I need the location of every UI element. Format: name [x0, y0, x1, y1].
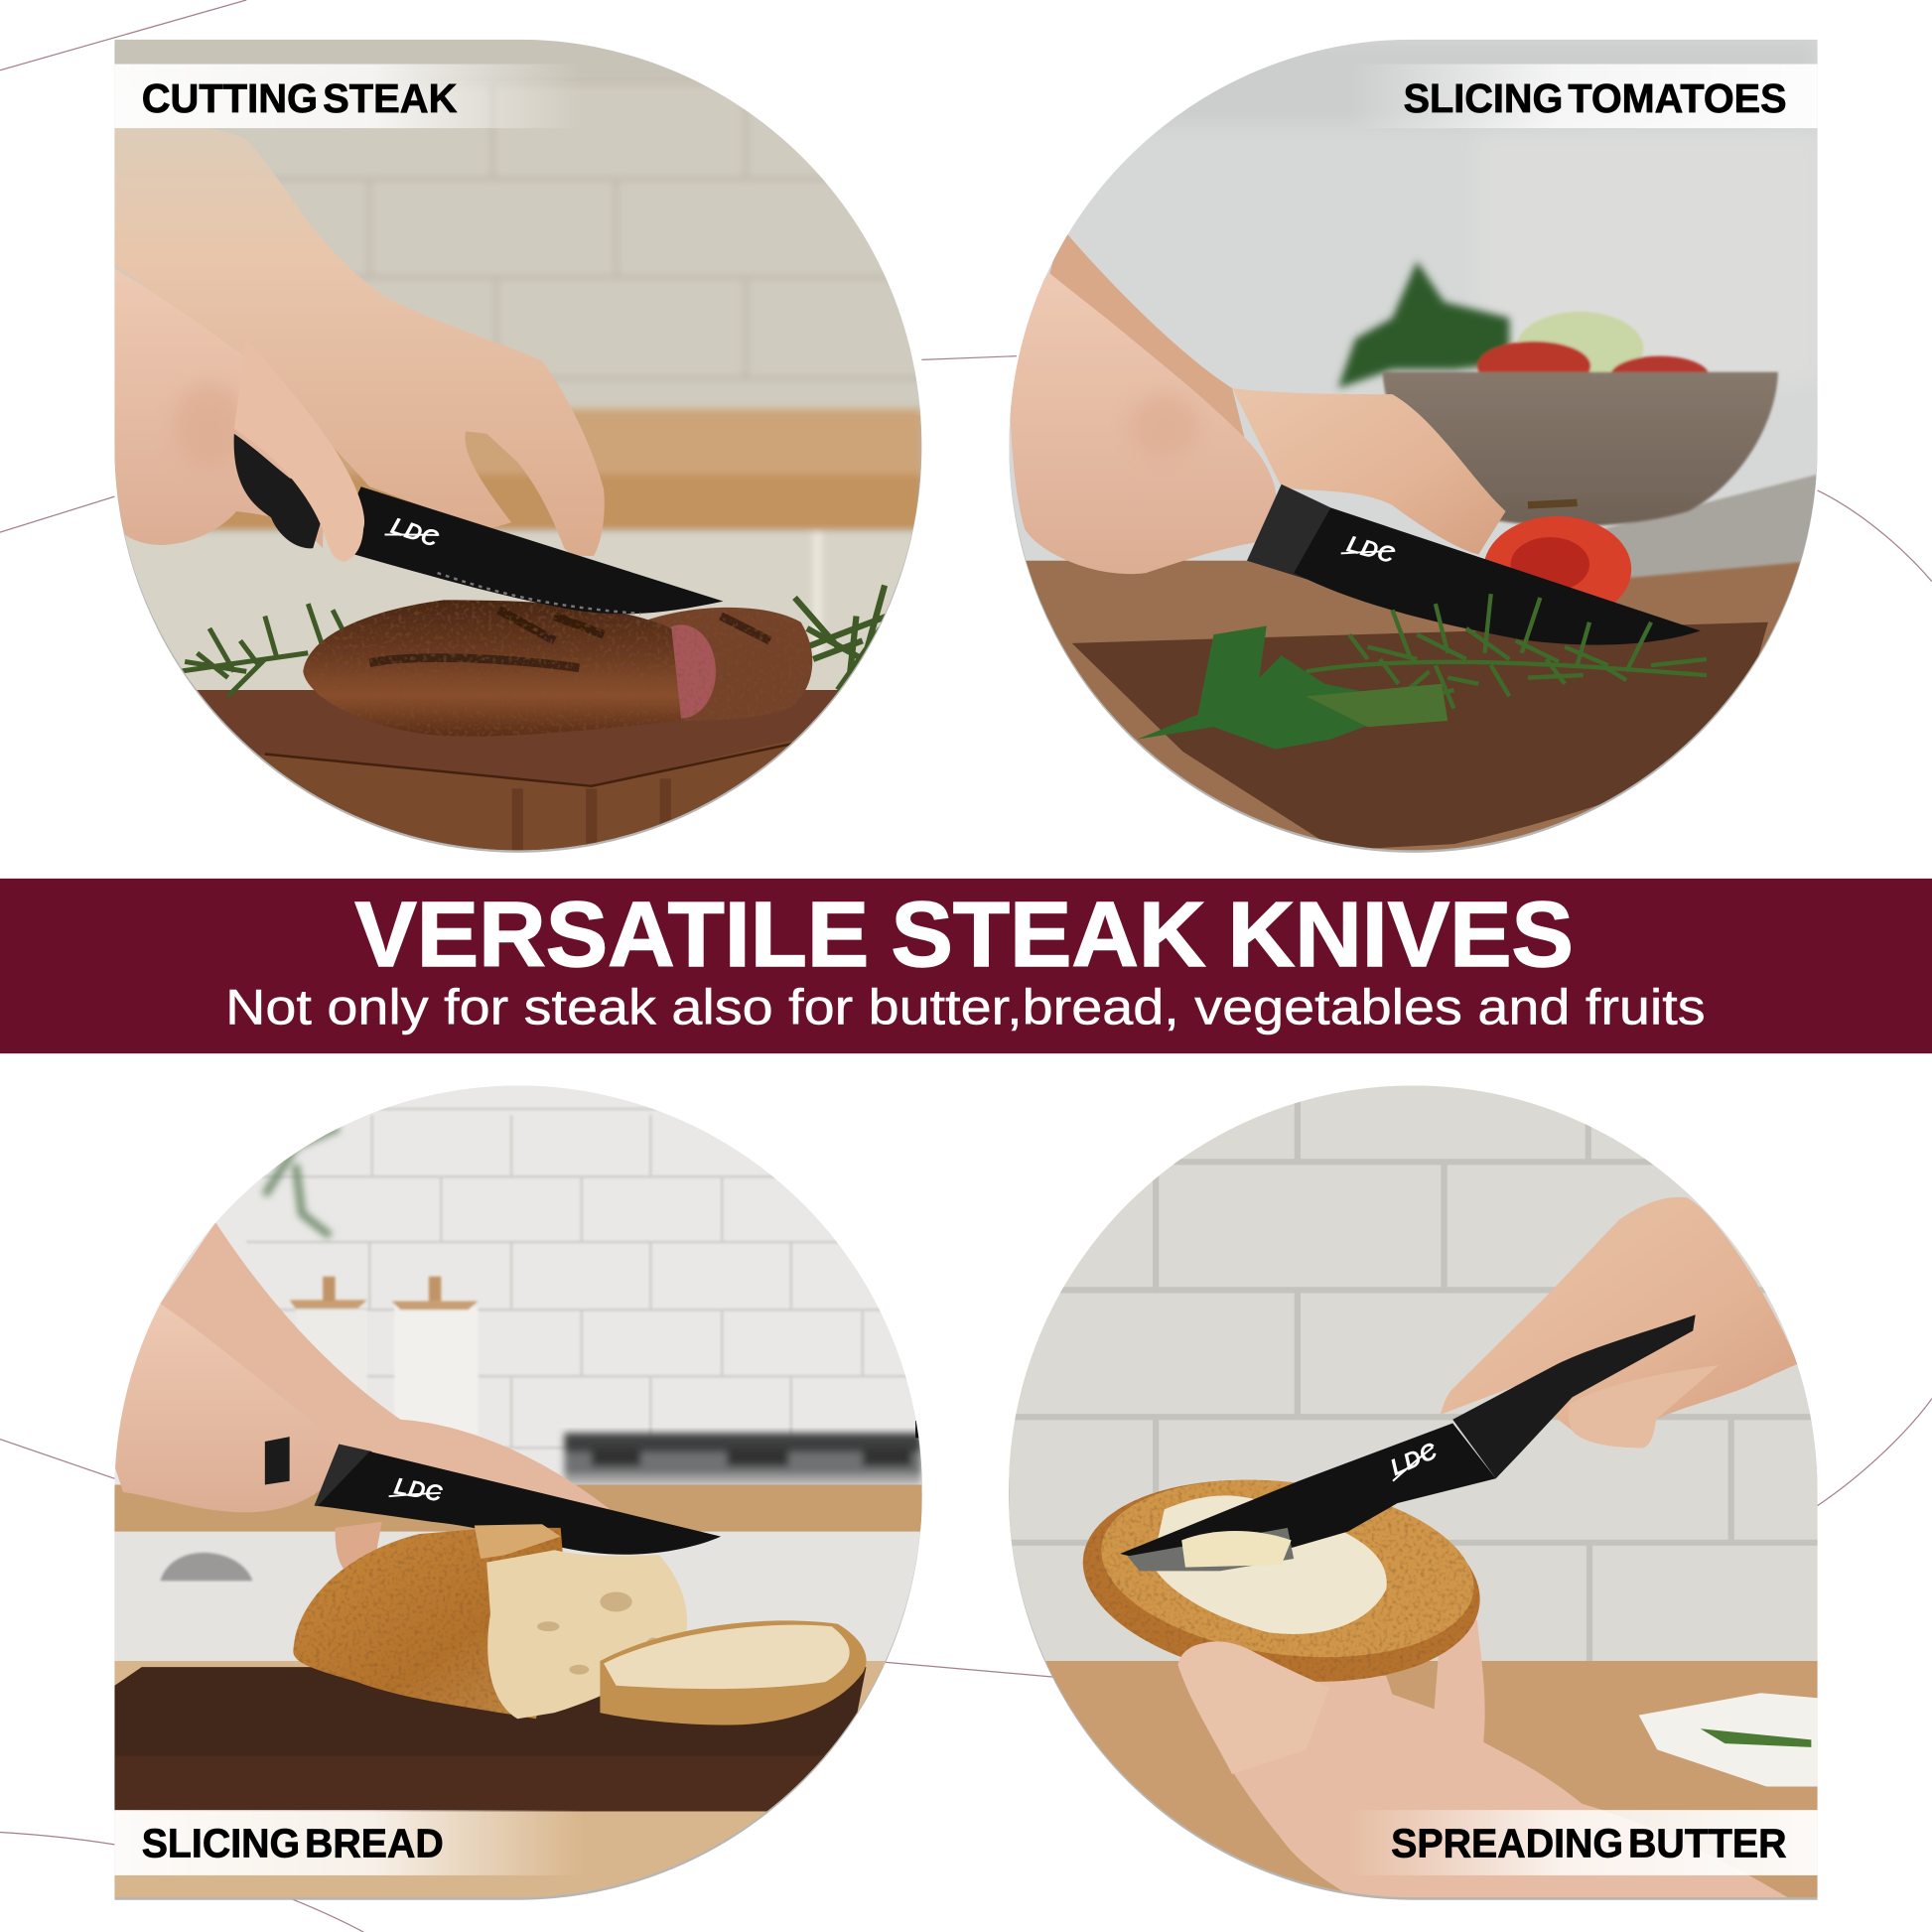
wood counter [1009, 561, 1818, 857]
logo [389, 1477, 443, 1501]
thumb over toast [1177, 1641, 1329, 1774]
knife [265, 1437, 721, 1555]
toast [1071, 1458, 1491, 1703]
label band: slicing bread [114, 1810, 583, 1875]
arm and hands [114, 1222, 610, 1571]
cabinet [114, 1532, 921, 1667]
thumb [234, 385, 365, 562]
banner background [0, 879, 1932, 1053]
scene: cutting steak [114, 40, 921, 850]
label: slicing bread: SLICING BREAD [142, 1820, 444, 1865]
panel edge: spreading butter [1009, 1088, 1818, 1900]
wood counter [114, 409, 921, 531]
panel: cutting steak [114, 40, 921, 853]
bread loaf [293, 1528, 567, 1719]
sprig [265, 1128, 339, 1236]
panel: slicing bread [114, 1085, 922, 1907]
wood table [114, 1661, 921, 1907]
wall [1009, 40, 1818, 582]
stove [564, 1433, 921, 1484]
cutting board [197, 690, 840, 850]
panel: slicing tomatoes [1009, 40, 1818, 857]
parsley [1138, 625, 1448, 750]
logo: LDC [1344, 530, 1398, 568]
tomato [1485, 498, 1632, 603]
wood table [1009, 1661, 1818, 1907]
cutting board [1072, 622, 1768, 850]
knife [1247, 484, 1701, 645]
logo: LDC [392, 1472, 445, 1507]
bread interior [475, 1524, 687, 1719]
knife [1120, 1314, 1696, 1571]
label band: cutting steak [114, 65, 583, 128]
subtitle: Not only for steak also for butter,bread, vegetables and fruits [225, 979, 1706, 1035]
label band: spreading butter [1349, 1810, 1818, 1875]
lower hand and fingers [1177, 1614, 1799, 1903]
cabinet [114, 531, 921, 697]
label band: slicing tomatoes [1349, 65, 1818, 128]
thumb on handle [1568, 1365, 1719, 1448]
dish with herbs [1639, 1693, 1818, 1787]
rosemary [179, 586, 888, 696]
arm and hands [1009, 228, 1506, 574]
rosemary [1307, 594, 1707, 715]
upper hand [1441, 1197, 1798, 1448]
kitchen wall [114, 40, 921, 415]
scene: slicing bread [114, 1085, 921, 1907]
cutting board [114, 1667, 866, 1811]
label: slicing tomatoes: SLICING TOMATOES [1404, 75, 1787, 121]
canisters [290, 1277, 479, 1436]
knife [234, 434, 724, 614]
banner [0, 879, 1932, 1053]
panel edge: slicing bread [114, 1088, 922, 1900]
panel: spreading butter [1009, 1085, 1818, 1907]
panel edge: slicing tomatoes [1009, 42, 1818, 853]
bowl of vegetables [1338, 261, 1778, 526]
scene: spreading butter [1009, 1085, 1818, 1907]
wood counter [114, 1484, 921, 1532]
logo [1340, 536, 1396, 562]
black speck [915, 1421, 921, 1438]
bread slice [600, 1620, 867, 1725]
logo: LDC [388, 512, 443, 552]
logo: LDC [1386, 1438, 1442, 1480]
title: VERSATILE STEAK KNIVES [354, 883, 1574, 986]
scene: slicing tomatoes [1009, 40, 1818, 857]
knuckle shading [179, 385, 238, 460]
logo [385, 518, 439, 546]
steak [303, 600, 812, 737]
label: spreading butter: SPREADING BUTTER [1391, 1820, 1787, 1865]
front hand [114, 269, 323, 548]
tiled wall [114, 1085, 921, 1492]
back arm and hand [114, 125, 605, 556]
towel [1589, 475, 1818, 579]
label: cutting steak: CUTTING STEAK [142, 75, 458, 121]
panel edge: cutting steak [114, 42, 921, 853]
tiled wall [1009, 1085, 1818, 1665]
butter [1152, 1495, 1387, 1634]
